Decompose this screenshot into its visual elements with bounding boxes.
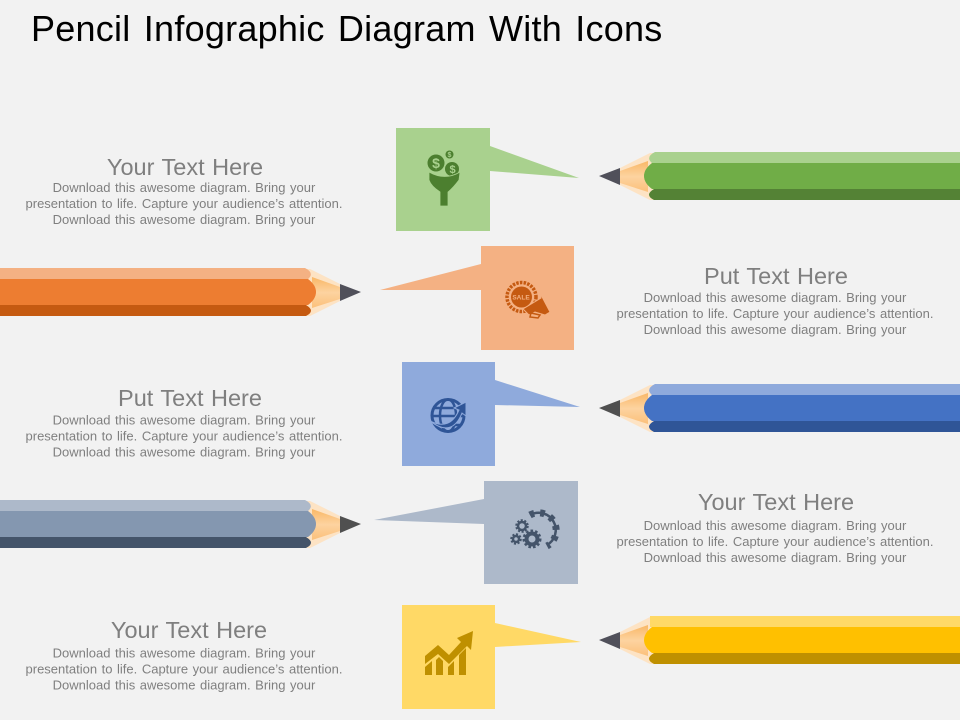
text block: blue row: Download this awesome diagram. Bring your — [53, 444, 316, 460]
text block: slate row: Download this awesome diagram. Bring your — [644, 518, 907, 533]
text block: orange row: Download this awesome diagram. Bring your — [644, 290, 907, 305]
icon: money funnel: $ — [432, 155, 440, 171]
text block: yellow row: presentation to life. Capture your audience’s attention. — [26, 662, 342, 676]
text block: yellow row — [26, 617, 342, 692]
icon: globe with arrow — [430, 400, 466, 432]
text block: yellow row: Download this awesome diagram. Bring your — [53, 678, 316, 692]
icon: money funnel: $ — [449, 164, 456, 176]
panel: orange row — [0, 246, 933, 350]
icon: growth chart — [425, 631, 473, 675]
callout: yellow — [402, 605, 581, 709]
callout: orange — [380, 246, 574, 350]
text block: orange row: presentation to life. Capture your audience’s attention. — [617, 306, 933, 321]
text block: green row: Download this awesome diagram. Bring your — [53, 212, 316, 227]
panel: yellow row — [26, 605, 960, 709]
icon: sale badge and megaphone: SALE — [512, 294, 530, 302]
callout: slate — [374, 481, 578, 584]
text block: blue row: Put Text Here — [118, 385, 262, 411]
icon: sale badge and megaphone — [507, 282, 550, 318]
title: Pencil Infographic Diagram With Icons — [31, 8, 663, 49]
text block: green row: presentation to life. Capture your audience’s attention. — [26, 196, 342, 211]
panel: slate row — [0, 481, 933, 584]
text block: orange row: Put Text Here — [704, 263, 848, 289]
text block: blue row — [26, 385, 342, 460]
callout: blue — [402, 362, 580, 466]
pencil: blue — [599, 384, 960, 432]
text block: slate row — [617, 489, 933, 565]
text block: slate row: Your Text Here — [698, 489, 854, 515]
panel: blue row — [26, 362, 960, 466]
text block: blue row: Download this awesome diagram. Bring your — [53, 412, 316, 428]
icon: gears — [512, 513, 556, 547]
pencil: green — [599, 152, 960, 200]
pencil: orange — [0, 268, 361, 316]
text block: green row: Download this awesome diagram. Bring your — [53, 180, 316, 195]
text block: slate row: Download this awesome diagram. Bring your — [644, 550, 907, 565]
text block: blue row: presentation to life. Capture your audience’s attention. — [26, 428, 342, 444]
callout: green — [396, 128, 579, 231]
text block: orange row: Download this awesome diagram. Bring your — [644, 322, 907, 337]
text block: green row: Your Text Here — [107, 154, 263, 180]
icon: money funnel: $ — [448, 152, 452, 159]
panel: green row — [26, 128, 960, 231]
text block: slate row: presentation to life. Capture your audience’s attention. — [617, 534, 933, 549]
icon: money funnel — [428, 150, 460, 206]
pencil: slate — [0, 500, 361, 548]
text block: orange row — [617, 263, 933, 337]
text block: yellow row: Your Text Here — [111, 617, 267, 643]
text block: yellow row: Download this awesome diagram. Bring your — [53, 646, 316, 660]
text block: green row — [26, 154, 342, 227]
pencil: yellow — [599, 616, 960, 664]
